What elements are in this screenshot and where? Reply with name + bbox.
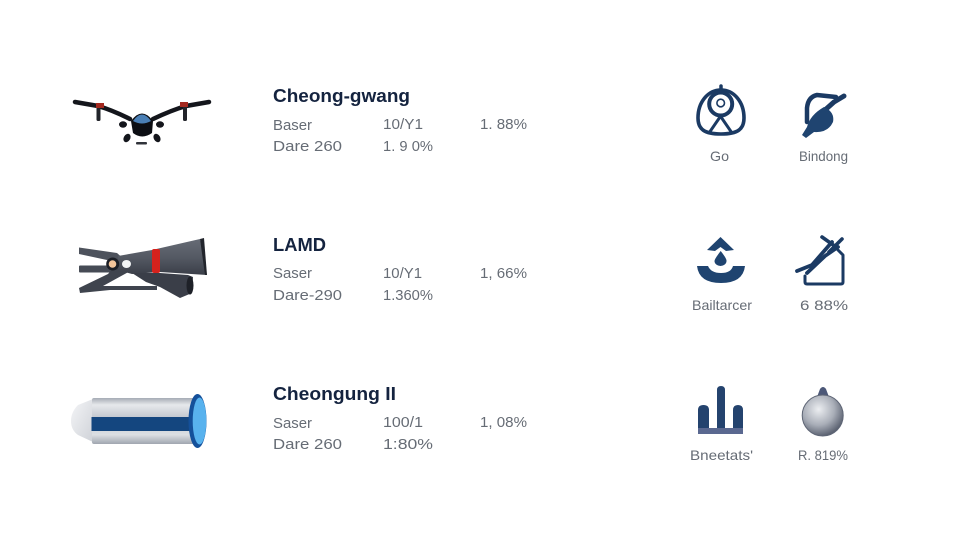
row 3: Cheongung II: [71, 383, 848, 463]
label: Go: [710, 148, 729, 164]
stats: Baser: [273, 118, 312, 134]
drone illustration: [75, 102, 209, 144]
stats: [273, 266, 527, 304]
stats: 10/Y1: [383, 117, 423, 133]
stats: 1. 9 0%: [383, 139, 433, 155]
stats: Dare-290: [273, 288, 342, 304]
icon: sphere: [802, 387, 843, 436]
stats: Saser: [273, 266, 312, 282]
icon: target figure: [698, 86, 744, 134]
icon: three towers: [698, 386, 743, 434]
stats: [273, 415, 527, 453]
stats: 1:80%: [383, 437, 433, 453]
stats: 100/1: [383, 415, 423, 431]
stats: 1. 88%: [480, 117, 527, 133]
heading: Cheongung II: [273, 383, 396, 404]
label: 6 88%: [800, 297, 848, 313]
icon: pencil and house: [797, 237, 843, 284]
stats: Dare 260: [273, 139, 342, 155]
label: Bneetats': [690, 447, 753, 463]
row 2: LAMD: [79, 234, 848, 313]
heading: Cheong-gwang: [273, 85, 410, 106]
row 1: Cheong-gwang: [75, 85, 848, 164]
icon: up arrow and tray: [697, 237, 745, 283]
stats: 1, 66%: [480, 266, 527, 282]
stats: 1.360%: [383, 288, 433, 304]
stats: Dare 260: [273, 437, 342, 453]
label: Bailtarcer: [692, 297, 752, 313]
stats: Saser: [273, 416, 312, 432]
label: R. 819%: [798, 447, 848, 463]
stats: 10/Y1: [383, 266, 422, 282]
stats: 1, 08%: [480, 415, 527, 431]
missile illustration: [71, 394, 206, 448]
stats: [273, 117, 527, 155]
label: Bindong: [799, 148, 848, 164]
launcher illustration: [79, 238, 207, 298]
heading: LAMD: [273, 234, 326, 255]
icon: wrench: [802, 95, 844, 138]
